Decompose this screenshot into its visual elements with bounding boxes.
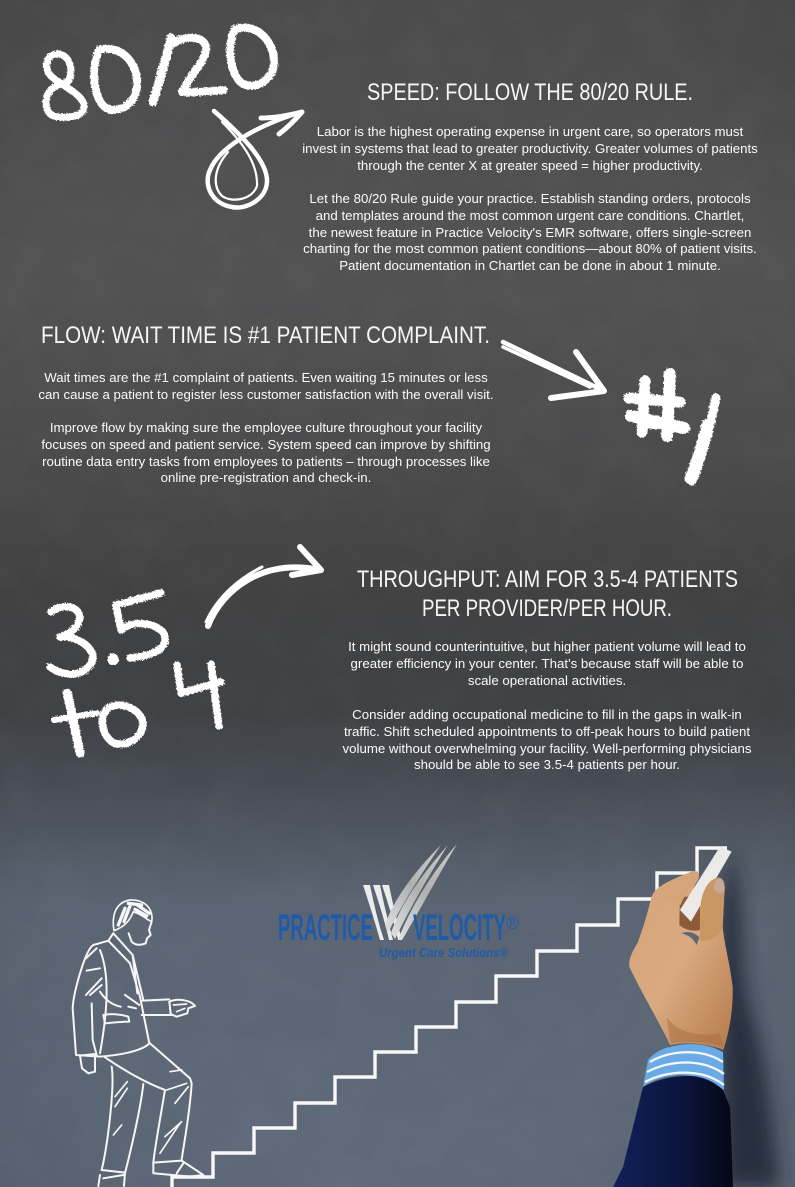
text: throughput paragraph 1: [348, 639, 746, 688]
hand: knuckle shading: [667, 1017, 723, 1047]
heading: speed: SPEED: FOLLOW THE 80/20 RULE.: [367, 79, 693, 106]
text: speed paragraph 1: through the center X at greater speed = higher productivity.: [357, 158, 703, 173]
chalk staircase: [172, 848, 727, 1187]
man: head and hair: [113, 900, 152, 945]
text: flow paragraph 2: focuses on speed and patient service. System speed can improve by shifting: [41, 437, 491, 452]
text: throughput paragraph 2: traffic. Shift scheduled appointments to off-peak hours to build patient: [344, 724, 750, 739]
text: throughput paragraph 1: greater efficiency in your center. That's because staff will be able to: [351, 656, 743, 671]
chalk number: 80/20: [46, 27, 274, 117]
logo: tagline: Urgent Care Solutions®: [379, 946, 509, 960]
heading: throughput line 1 and 2: [357, 566, 738, 622]
hand: suit sleeve: [613, 1076, 733, 1187]
man: jacket: [73, 933, 149, 1057]
text: flow paragraph 1: Wait times are the #1 complaint of patients. Even waiting 15 minutes or less: [44, 370, 488, 385]
hand drawing with chalk: [613, 847, 780, 1187]
arrow: curved arrow to throughput: [206, 547, 321, 626]
text: speed paragraph 1: Labor is the highest operating expense in urgent care, so operators must: [317, 124, 743, 139]
hand: thumb over chalk: [660, 871, 699, 905]
text: speed paragraph 1: invest in systems that lead to greater productivity. Greater volumes of patients: [302, 141, 758, 156]
text: speed paragraph 2: the newest feature in Practice Velocity's EMR software, offers single-screen: [309, 225, 751, 240]
heading: flow: FLOW: WAIT TIME IS #1 PATIENT COMPLAINT.: [41, 322, 490, 349]
chalk number: 3.5 to 4: [50, 593, 221, 753]
chalk number: #1: [629, 374, 716, 481]
hand: fingers and palm: [629, 871, 733, 1050]
panel: flow: [38, 322, 494, 485]
logo: registered mark: ®: [506, 913, 519, 933]
logo: check mark: [363, 844, 457, 940]
chalk man climbing stairs: [73, 900, 203, 1186]
hand: striped shirt cuff: [643, 1044, 724, 1090]
text: flow paragraph 2: online pre-registration and check-in.: [161, 470, 371, 485]
text: speed paragraph 2: charting for the most common patient conditions—about 80% of patient visits.: [303, 241, 757, 256]
panel: speed: [302, 79, 758, 273]
logo: Practice Velocity: VELOCITY: [413, 907, 506, 948]
panel: throughput: [342, 566, 751, 772]
text: speed paragraph 2: Let the 80/20 Rule guide your practice. Establish standing orders, protocols: [309, 191, 751, 206]
text: flow paragraph 2: Improve flow by making sure the employee culture throughout your facility: [50, 420, 482, 435]
text: throughput paragraph 2: Consider adding occupational medicine to fill in the gaps in walk-in: [352, 707, 742, 722]
text: flow paragraph 1: [38, 370, 494, 402]
text: throughput paragraph 1: It might sound counterintuitive, but higher patient volume will lead to: [348, 639, 746, 654]
hand: chalk stick: [680, 847, 732, 922]
man: legs and shoes: [98, 1043, 203, 1186]
text: throughput paragraph 2: [342, 707, 751, 772]
heading: throughput line 1 and 2: PER PROVIDER/PER HOUR.: [422, 595, 672, 622]
text: speed paragraph 1: [302, 124, 758, 173]
hand: inner shading: [679, 897, 700, 931]
text: speed paragraph 2: and templates around the most common urgent care conditions. Chartlet,: [316, 208, 744, 223]
logo: Practice Velocity: [278, 844, 519, 960]
text: flow paragraph 2: [41, 420, 491, 485]
text: speed paragraph 2: Patient documentation in Chartlet can be done in about 1 minute.: [339, 258, 721, 273]
text: throughput paragraph 2: volume without overwhelming your facility. Well-performing physicians: [343, 741, 751, 756]
text: flow paragraph 1: can cause a patient to register less customer satisfaction with the overall visit.: [38, 387, 494, 402]
hand: index finger over chalk: [699, 878, 725, 941]
text: speed paragraph 2: [303, 191, 757, 273]
man: arm and hands: [80, 999, 195, 1073]
arrow: pointing to #1: [503, 342, 604, 398]
text: flow paragraph 2: routine data entry tasks from employees to patients – through processes like: [42, 454, 490, 469]
text: throughput paragraph 1: scale operational activities.: [468, 673, 626, 688]
text: throughput paragraph 2: should be able to see 3.5-4 patients per hour.: [414, 757, 680, 772]
arrow: looping arrow from 80/20: [208, 111, 302, 208]
logo: wordmark: PRACTICE: [278, 907, 373, 948]
hand: cast shadow: [720, 855, 780, 1187]
hand: fingernail: [714, 879, 724, 893]
